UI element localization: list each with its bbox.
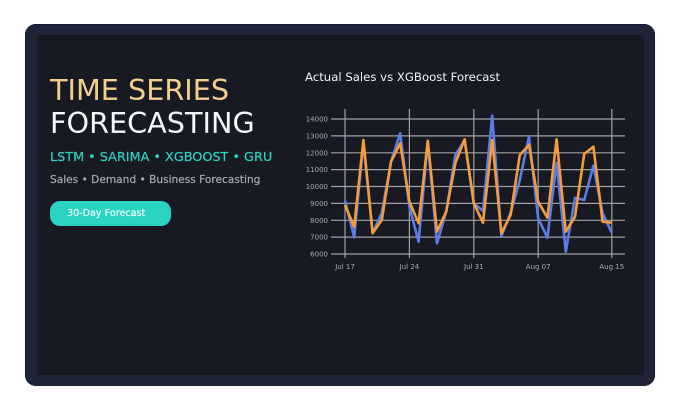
- button: 30-day forecast: [50, 201, 171, 226]
- text: model list: LSTM • SARIMA • XGBOOST • GRU: [50, 150, 272, 165]
- button: 30-day forecast: 30-Day Forecast: [67, 208, 145, 219]
- y-axis labels: 11000: [306, 166, 328, 174]
- y-axis labels: 7000: [310, 234, 328, 242]
- y-axis labels: 9000: [310, 200, 328, 208]
- y-axis labels: 10000: [306, 183, 328, 191]
- x-axis labels: Jul 17: [334, 263, 355, 271]
- y-axis labels: 13000: [306, 132, 328, 140]
- y-axis labels: 14000: [306, 116, 328, 124]
- series: xgboost forecast: [345, 139, 612, 233]
- y-axis labels: [306, 116, 328, 258]
- text: use cases: Sales • Demand • Business Forecasting: [50, 174, 260, 186]
- heading: time series: TIME SERIES: [50, 73, 229, 107]
- heading: forecasting: FORECASTING: [50, 106, 255, 140]
- x-axis labels: Jul 31: [463, 263, 484, 271]
- x-axis labels: Jul 24: [399, 263, 420, 271]
- x-axis labels: Aug 15: [599, 263, 624, 271]
- x-axis labels: Aug 07: [526, 263, 551, 271]
- y-axis labels: 6000: [310, 250, 328, 258]
- panel: inner dark area: [37, 35, 644, 375]
- y-axis labels: 8000: [310, 217, 328, 225]
- chart title: Actual Sales vs XGBoost Forecast: [305, 70, 500, 84]
- y-axis labels: 12000: [306, 149, 328, 157]
- series: actual sales: [345, 116, 612, 252]
- x-axis labels: [334, 263, 624, 271]
